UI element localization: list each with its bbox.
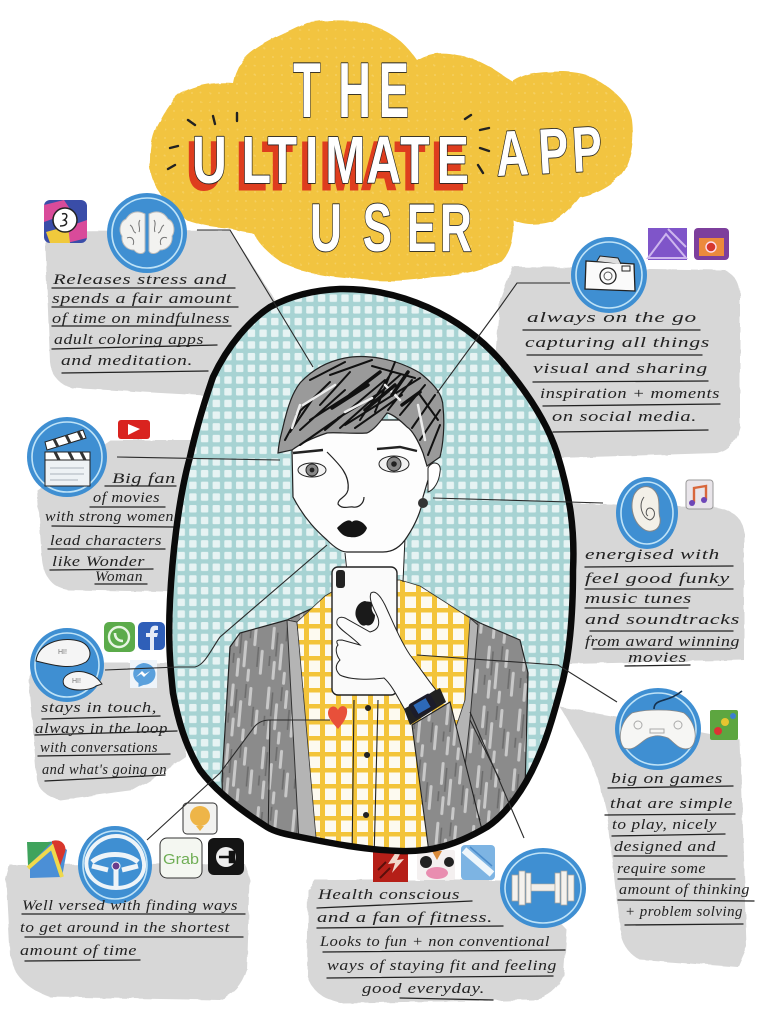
panel text: mindfulness <box>52 272 238 373</box>
icon: blue fitness app <box>461 845 495 880</box>
panel: navigation <box>6 803 250 1000</box>
ear and earring <box>428 463 440 492</box>
panel text: fitness: Health conscious <box>317 887 460 903</box>
icon: instagram <box>694 228 729 260</box>
icon: grab <box>160 838 202 878</box>
panel text: games: amount of thinking <box>619 882 750 898</box>
plaid shirt <box>297 580 470 860</box>
brows <box>293 447 417 453</box>
panel: photography <box>495 228 740 458</box>
icon: steering wheel <box>78 826 152 904</box>
panel text: photography: visual and sharing <box>533 361 708 377</box>
main oval with dotted background <box>169 289 573 851</box>
icon: google maps <box>27 840 67 878</box>
panel text: navigation: Well versed with finding ways <box>22 898 238 914</box>
cardigan <box>221 608 529 837</box>
panel text: movies: like Wonder <box>52 554 145 570</box>
panel text: games: designed and <box>614 839 716 855</box>
panel text: messaging: with conversations <box>40 740 158 756</box>
panel: mindfulness <box>44 193 275 396</box>
icon: colouring app <box>44 200 87 243</box>
icon: games app <box>710 710 738 740</box>
panel text: fitness: good everyday. <box>362 981 485 997</box>
sparks <box>168 113 489 173</box>
panel text: mindfulness: spends a fair amount <box>52 291 232 307</box>
title word: ULTIMATE shadow and face: ULTIMATE <box>192 123 469 198</box>
lips <box>337 520 367 537</box>
panel text: movies: of movies <box>93 490 160 506</box>
panel text: movies <box>45 471 176 585</box>
panel: music <box>570 477 744 666</box>
panel text: photography <box>523 310 720 432</box>
panel text: photography: capturing all things <box>525 335 710 351</box>
icon: red fitness app <box>373 850 408 882</box>
icon: music app <box>686 480 713 509</box>
panel text: mindfulness: adult coloring apps <box>54 332 204 348</box>
icon: chat bubbles: HI! <box>72 678 81 685</box>
panel text: music: feel good funky <box>585 571 730 587</box>
shirt buttons <box>366 708 368 815</box>
panel text: photography: inspiration + moments <box>540 386 720 402</box>
panel text: games: + problem solving <box>625 904 743 920</box>
icon: purple photo app <box>648 228 687 260</box>
hair <box>278 357 444 466</box>
panel: games <box>560 688 754 967</box>
panel: messaging <box>29 622 190 800</box>
icon: clapperboard <box>27 417 107 497</box>
panel: fitness <box>307 845 586 1003</box>
panel: movies <box>27 417 200 592</box>
icon: cow app <box>417 850 455 880</box>
panel text: games: that are simple <box>610 796 733 812</box>
panel text: photography: always on the go <box>527 310 697 326</box>
face <box>292 420 440 552</box>
panel text: messaging <box>35 700 177 781</box>
panel text: messaging: and what's going on <box>42 762 167 778</box>
title word: APP: APP <box>494 113 604 190</box>
icon: messenger <box>130 660 157 688</box>
panel text: movies: Woman <box>95 569 143 585</box>
title word: ULTIMATE shadow and face: ULTIMATE <box>187 129 464 204</box>
icon: facebook <box>138 622 165 650</box>
panel text: games: big on games <box>611 771 723 787</box>
panel text: music: movies <box>628 650 687 666</box>
icon: camera <box>571 237 647 313</box>
icon: uber <box>208 838 244 875</box>
panel text: games <box>605 771 754 925</box>
oval outline <box>169 289 573 851</box>
panel text: music: and soundtracks <box>585 612 740 628</box>
icon: waze <box>183 803 217 834</box>
icon: chat bubbles: HI! <box>58 649 67 656</box>
heart <box>328 706 347 729</box>
panel text: navigation: amount of time <box>20 943 137 959</box>
panel text: movies: Big fan <box>112 471 176 487</box>
icon: brain <box>107 193 187 273</box>
icon: ear <box>616 477 678 549</box>
panel text: fitness <box>317 887 565 1000</box>
panel text: photography: on social media. <box>552 409 697 425</box>
panel text: messaging: always in the loop <box>35 721 168 737</box>
watch <box>404 688 446 725</box>
title word: USER: USER <box>310 191 472 266</box>
panel text: movies: with strong women <box>45 509 174 525</box>
panel text: fitness: and a fan of fitness. <box>317 910 493 926</box>
icon: grab: Grab <box>163 851 199 868</box>
icon: chat bubbles <box>30 628 104 702</box>
panel text: messaging: stays in touch, <box>41 700 157 716</box>
panel text: mindfulness: of time on mindfulness <box>52 311 230 327</box>
panel text: movies: lead characters <box>50 533 162 549</box>
eyes <box>298 463 326 477</box>
hand <box>336 592 436 710</box>
panel text: music: music tunes <box>585 591 692 607</box>
icon: whatsapp <box>104 622 135 652</box>
panel text: navigation <box>20 898 245 961</box>
panel text: mindfulness: Releases stress and <box>52 272 227 288</box>
phone <box>332 567 397 695</box>
shirt placket <box>352 700 378 860</box>
connector lines <box>105 230 617 840</box>
neck <box>345 530 405 575</box>
panel text: music: energised with <box>585 547 720 563</box>
panel text: music <box>585 547 740 666</box>
panel text: mindfulness: and meditation. <box>61 353 193 369</box>
panel text: games: require some <box>617 861 706 877</box>
title cloud <box>150 20 633 281</box>
panel text: fitness: Looks to fun + non conventional <box>319 934 550 950</box>
panel text: navigation: to get around in the shortest <box>20 920 230 936</box>
nose line <box>327 452 364 507</box>
panel text: music: from award winning <box>585 634 740 650</box>
icon: dumbbell <box>500 848 586 928</box>
panel text: games: to play, nicely <box>612 817 717 833</box>
icon: game controller <box>615 688 701 770</box>
portrait of the user <box>222 357 528 860</box>
panel text: fitness: ways of staying fit and feeling <box>327 958 557 974</box>
sleeve <box>412 702 482 860</box>
title word: THE: THE <box>293 46 409 134</box>
icon: youtube <box>118 420 150 439</box>
